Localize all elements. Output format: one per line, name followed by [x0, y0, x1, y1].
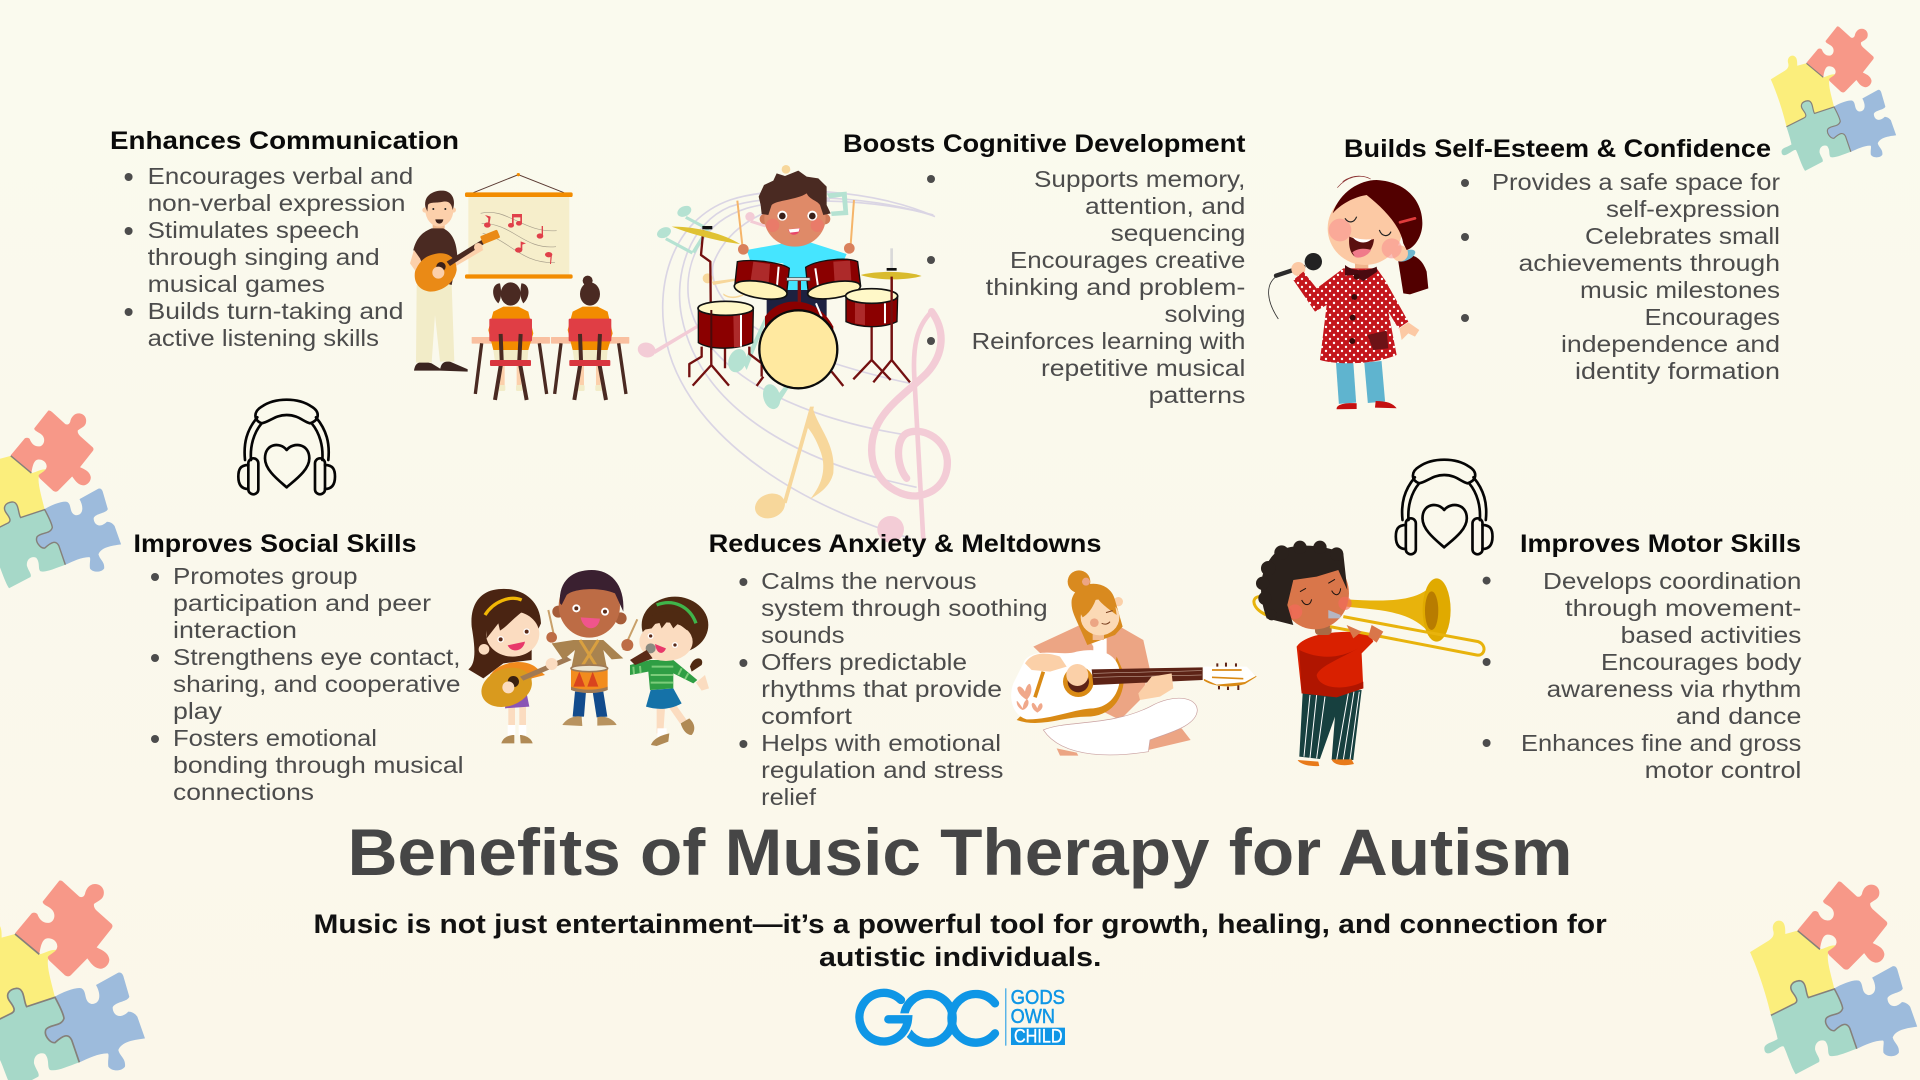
illustration: three children playing music — [468, 570, 709, 746]
logo: Gods Own Child — [859, 987, 1065, 1048]
bullet list: Celebrates small — [1585, 223, 1780, 249]
bullet list: active listening skills — [148, 325, 379, 351]
illustration: musical swirl — [636, 165, 947, 543]
subtitle — [314, 909, 1607, 972]
bullet list: music milestones — [1580, 277, 1780, 303]
bullet list: Stimulates speech — [148, 217, 360, 243]
logo: Gods Own Child: CHILD — [1014, 1027, 1063, 1048]
puzzle: top right — [1771, 26, 1896, 171]
illustration: teacher with guitar and students — [410, 173, 629, 400]
bullet list: connections — [173, 779, 314, 805]
bullet list: musical games — [148, 271, 325, 297]
illustration: boy playing drums — [672, 171, 922, 388]
bullet list: sharing, and cooperative — [173, 671, 460, 697]
bullet list — [739, 568, 1048, 810]
bullet list: Builds turn-taking and — [148, 298, 404, 324]
teacher — [414, 361, 468, 372]
puzzle: bottom left — [0, 881, 145, 1080]
illustration: girl singing — [1269, 176, 1428, 409]
panel: reduces anxiety and meltdowns — [709, 530, 1102, 810]
bullet list: play — [173, 698, 222, 724]
bullet list — [125, 163, 413, 351]
bullet list: self-expression — [1606, 196, 1780, 222]
bullet list: Encourages body — [1601, 649, 1802, 675]
bullet list: achievements through — [1518, 250, 1780, 276]
bullet list: sequencing — [1111, 220, 1245, 246]
sticks — [737, 200, 854, 245]
bullet list: Strengthens eye contact, — [173, 644, 460, 670]
icon: headphones with heart, right — [1396, 460, 1492, 554]
bullet list — [1461, 169, 1780, 384]
panel: builds self-esteem and confidence — [1344, 135, 1780, 384]
bullet list: attention, and — [1085, 193, 1245, 219]
heading: Builds Self-Esteem & Confidence — [1344, 135, 1771, 163]
cymbals — [890, 248, 893, 269]
bullet list: thinking and problem- — [986, 274, 1245, 300]
bullet list: repetitive musical — [1041, 355, 1245, 381]
bullet list: regulation and stress — [761, 757, 1004, 783]
bullet list: Encourages verbal and — [148, 163, 413, 189]
bullet list: Encourages creative — [1010, 247, 1245, 273]
bullet list — [927, 166, 1245, 408]
heading: Enhances Communication — [110, 127, 459, 155]
bullet list: identity formation — [1575, 358, 1780, 384]
bullet list: interaction — [173, 617, 297, 643]
bullet list: comfort — [761, 703, 853, 729]
bullet list: relief — [761, 784, 817, 810]
subtitle: autistic individuals. — [819, 942, 1102, 972]
title: Benefits of Music Therapy for Autism — [348, 815, 1572, 889]
bullet list: independence and — [1561, 331, 1780, 357]
panel: improves social skills — [134, 530, 464, 805]
illustration: girl playing guitar — [1011, 570, 1257, 756]
bullet list: Promotes group — [173, 563, 358, 589]
bullet list: through movement- — [1565, 595, 1801, 621]
bullet list: awareness via rhythm — [1547, 676, 1801, 702]
bullet list: Supports memory, — [1034, 166, 1245, 192]
heading: Improves Motor Skills — [1520, 530, 1801, 558]
heading: Boosts Cognitive Development — [843, 130, 1246, 158]
panel: enhances communication — [110, 127, 459, 351]
heading: Reduces Anxiety & Meltdowns — [709, 530, 1102, 558]
icon: headphones with heart, left — [238, 400, 335, 494]
panel: improves motor skills — [1483, 530, 1802, 783]
bullet list: solving — [1164, 301, 1245, 327]
bullet list: Fosters emotional — [173, 725, 377, 751]
puzzle: middle left — [0, 410, 121, 588]
bullet list: system through soothing — [761, 595, 1048, 621]
bullet list: Enhances fine and gross — [1521, 730, 1801, 756]
bullet list — [1483, 568, 1802, 783]
middle boy — [573, 692, 607, 717]
bullet list: rhythms that provide — [761, 676, 1002, 702]
head — [760, 214, 770, 224]
drums — [735, 261, 789, 293]
puzzle: bottom right — [1750, 881, 1917, 1074]
bullet list — [151, 563, 464, 805]
bullet list: bonding through musical — [173, 752, 464, 778]
bullet list: sounds — [761, 622, 844, 648]
bullet list: non-verbal expression — [148, 190, 405, 216]
students — [472, 307, 550, 400]
bullet list: Reinforces learning with — [972, 328, 1245, 354]
bullet list: Encourages — [1645, 304, 1780, 330]
left girl — [508, 707, 526, 727]
bullet list: Calms the nervous — [761, 568, 976, 594]
bullet list: Helps with emotional — [761, 730, 1001, 756]
illustration: boy playing trombone — [1254, 541, 1484, 766]
poster — [473, 175, 564, 193]
logo: Gods Own Child: OWN — [1011, 1006, 1055, 1028]
logo: Gods Own Child: GODS — [1011, 987, 1065, 1009]
stands — [689, 230, 910, 386]
bullet list: through singing and — [148, 244, 380, 270]
bullet list: participation and peer — [173, 590, 431, 616]
bullet list: Develops coordination — [1543, 568, 1801, 594]
bullet list: motor control — [1645, 757, 1801, 783]
bullet list: Offers predictable — [761, 649, 967, 675]
right girl — [657, 705, 687, 733]
panel: boosts cognitive development — [843, 130, 1246, 408]
bullet list: patterns — [1149, 382, 1245, 408]
subtitle: Music is not just entertainment—it’s a powerful tool for growth, healing, and connection for — [314, 909, 1607, 939]
bullet list: based activities — [1621, 622, 1801, 648]
body — [767, 290, 827, 317]
bullet list: and dance — [1676, 703, 1801, 729]
heading: Improves Social Skills — [134, 530, 416, 558]
bullet list: Provides a safe space for — [1492, 169, 1780, 195]
